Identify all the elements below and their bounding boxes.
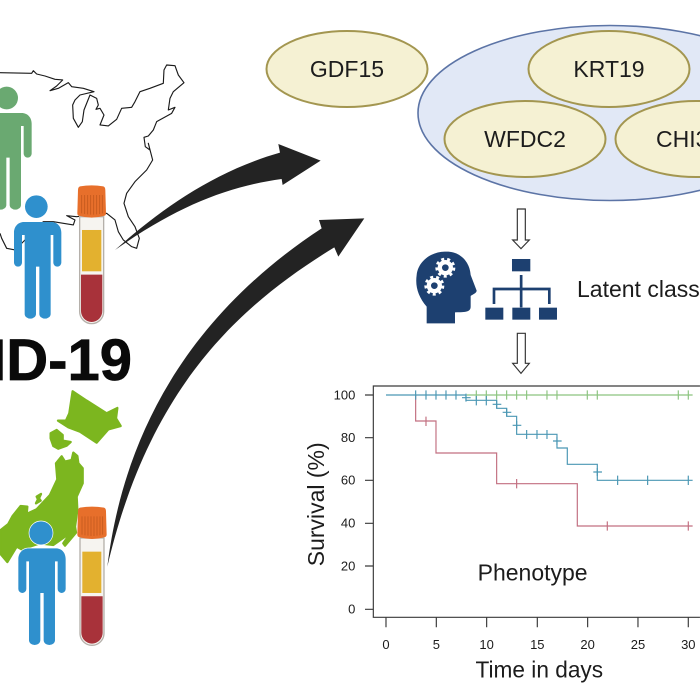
arrow: USA to biomarkers xyxy=(115,144,321,250)
icon: blood tube (USA) xyxy=(77,185,106,324)
y-axis numbers: 80 xyxy=(341,430,355,445)
x-axis numbers: 25 xyxy=(631,637,645,652)
y-axis title: Survival (%) xyxy=(303,442,329,566)
biomarker: CHI3L1 xyxy=(616,101,700,177)
arrow: Japan to biomarkers xyxy=(107,218,364,567)
curve: green phenotype xyxy=(467,390,693,400)
biomarker: WFDC2 xyxy=(444,101,606,177)
icon: head with gears xyxy=(416,252,477,323)
x-axis numbers: 20 xyxy=(580,637,595,652)
curve: blue phenotype xyxy=(386,390,693,485)
curve: red phenotype xyxy=(416,395,693,531)
plot axes xyxy=(365,386,700,627)
arrow: latent class to survival plot xyxy=(513,333,529,373)
y-axis numbers: 40 xyxy=(341,516,355,531)
icon: green person (USA) xyxy=(0,87,32,210)
biomarker group panel xyxy=(418,26,700,200)
biomarker: GDF15 xyxy=(266,31,428,107)
arrow: biomarkers to latent class xyxy=(513,209,529,249)
label: Latent class: Latent class xyxy=(577,276,700,302)
x-axis numbers: 0 xyxy=(382,637,390,652)
y-axis numbers xyxy=(334,387,355,617)
icon: hierarchy diagram xyxy=(485,259,557,320)
x-axis numbers: 5 xyxy=(433,637,440,652)
icon: blood tube (Japan) xyxy=(77,507,107,645)
x-axis numbers: 30 xyxy=(681,637,696,652)
x-axis numbers xyxy=(382,637,696,652)
x-axis numbers: 15 xyxy=(530,637,545,652)
icon: blue person (Japan) xyxy=(18,521,66,645)
map: North America outline xyxy=(0,65,184,250)
x-axis numbers: 10 xyxy=(479,637,494,652)
biomarker: KRT19 xyxy=(528,31,690,107)
y-axis numbers: 60 xyxy=(341,473,355,488)
icon: blue person (USA) xyxy=(14,195,61,319)
biomarker: KRT19: KRT19 xyxy=(573,56,645,82)
biomarker: GDF15: GDF15 xyxy=(310,56,384,82)
label: Phenotype: Phenotype xyxy=(478,560,588,586)
y-axis numbers: 100 xyxy=(334,387,355,402)
y-axis numbers: 0 xyxy=(348,602,355,617)
y-axis numbers: 20 xyxy=(341,558,355,573)
chart: Kaplan-Meier survival curves xyxy=(303,386,700,683)
map: Japan xyxy=(0,391,121,562)
x-axis title: Time in days xyxy=(476,657,603,683)
biomarker: WFDC2: WFDC2 xyxy=(484,126,566,152)
